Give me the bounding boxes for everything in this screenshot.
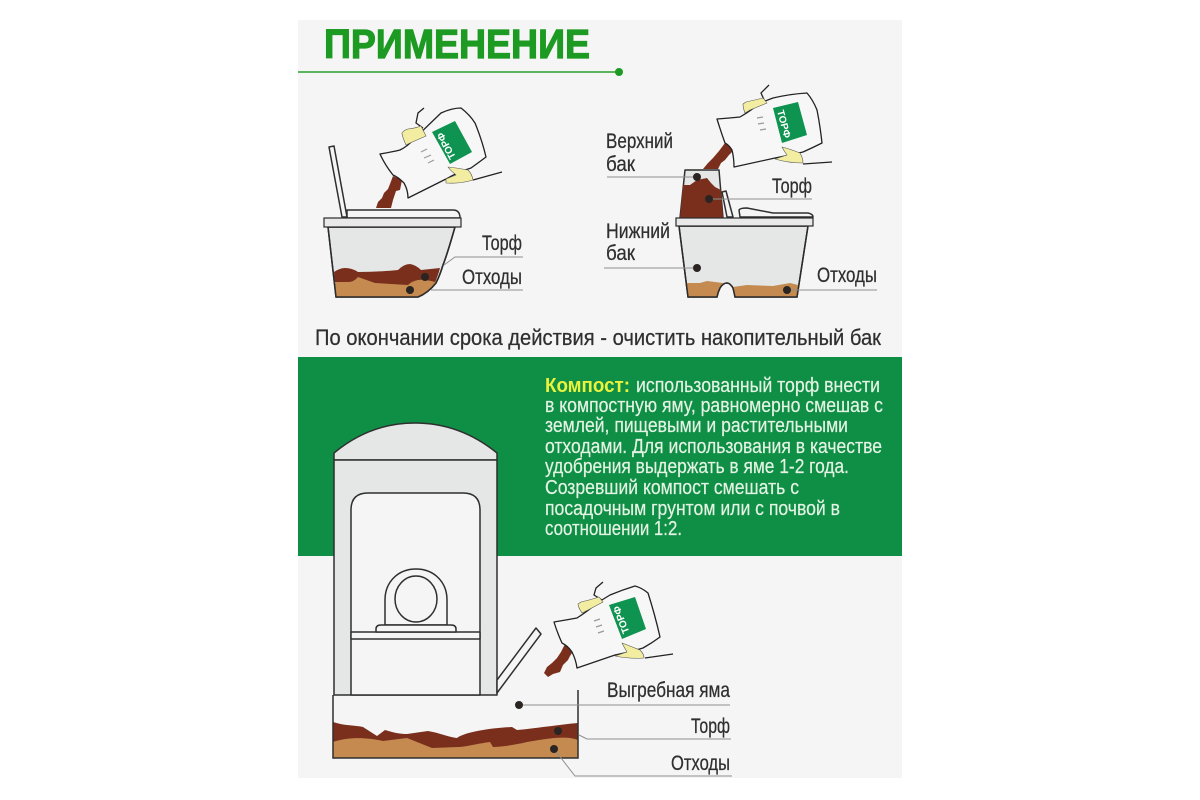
title: ПРИМЕНЕНИЕ xyxy=(324,21,590,67)
icon: peat bag pouring, left xyxy=(376,108,502,208)
label: waste, bottom: Отходы xyxy=(671,752,730,775)
panel: green compost band xyxy=(298,357,902,556)
label: peat, left: Торф xyxy=(482,232,522,255)
callout lines, left xyxy=(406,257,523,294)
label: peat, bottom: Торф xyxy=(691,715,730,738)
callout lines, right xyxy=(604,173,877,294)
compost text block: Созревший компост смешать с xyxy=(545,477,799,499)
compost text block: землей, пищевыми и растительными xyxy=(545,415,848,437)
label: waste, left: Отходы xyxy=(462,266,522,289)
compost text block: посадочным грунтом или с почвой в xyxy=(545,498,840,520)
compost text block xyxy=(545,375,883,540)
icon: peat bag pouring, right: ТОРФ xyxy=(774,109,792,140)
compost text block: соотношении 1:2. xyxy=(545,518,682,540)
icon: peat bag pouring, right xyxy=(703,85,832,169)
panel: two-tank toilet xyxy=(604,85,877,297)
compost text block: в компостную яму, равномерно смешав с xyxy=(545,395,883,417)
cesspit walls xyxy=(333,690,578,758)
outhouse interior xyxy=(351,493,480,695)
icon: peat bag pouring, bottom xyxy=(544,582,673,677)
upper tank xyxy=(680,170,723,218)
cesspit peat layer xyxy=(333,722,578,748)
label: upper tank: Верхний xyxy=(606,130,673,153)
compost text block: Компост: xyxy=(545,375,630,397)
outhouse walls xyxy=(334,460,497,695)
instruction sentence: По окончании срока действия - очистить накопительный бак xyxy=(315,325,881,350)
outhouse roof xyxy=(334,423,497,460)
lower tank, right xyxy=(676,218,813,297)
label: cesspit: Выгребная яма xyxy=(607,679,730,702)
label: lower tank: Нижний xyxy=(606,220,670,243)
toilet bench xyxy=(351,569,480,639)
label: lower tank, second line: бак xyxy=(606,242,636,265)
compost text block: отходами. Для использования в качестве xyxy=(545,436,882,458)
compost text block: использованный торф внести xyxy=(636,375,880,397)
label: peat, right: Торф xyxy=(772,175,812,198)
icon: peat bag pouring, bottom: ТОРФ xyxy=(612,604,632,635)
toilet lid and seat, right xyxy=(722,191,813,217)
compost text block: удобрения выдержать в яме 1-2 года. xyxy=(545,456,849,478)
title underline xyxy=(298,68,623,76)
toilet seat and lid, left xyxy=(324,146,461,227)
icon: peat bag pouring, left: ТОРФ xyxy=(435,130,459,161)
cesspit xyxy=(333,690,578,758)
panel: single-tank toilet xyxy=(324,108,523,297)
open pit hatch xyxy=(497,628,541,693)
callout lines, bottom xyxy=(515,701,732,776)
label: upper tank, second line: бак xyxy=(606,153,636,176)
lower tank, left xyxy=(328,227,455,297)
cesspit waste layer xyxy=(333,735,578,758)
label: waste, right: Отходы xyxy=(817,264,877,287)
outhouse xyxy=(334,423,541,695)
